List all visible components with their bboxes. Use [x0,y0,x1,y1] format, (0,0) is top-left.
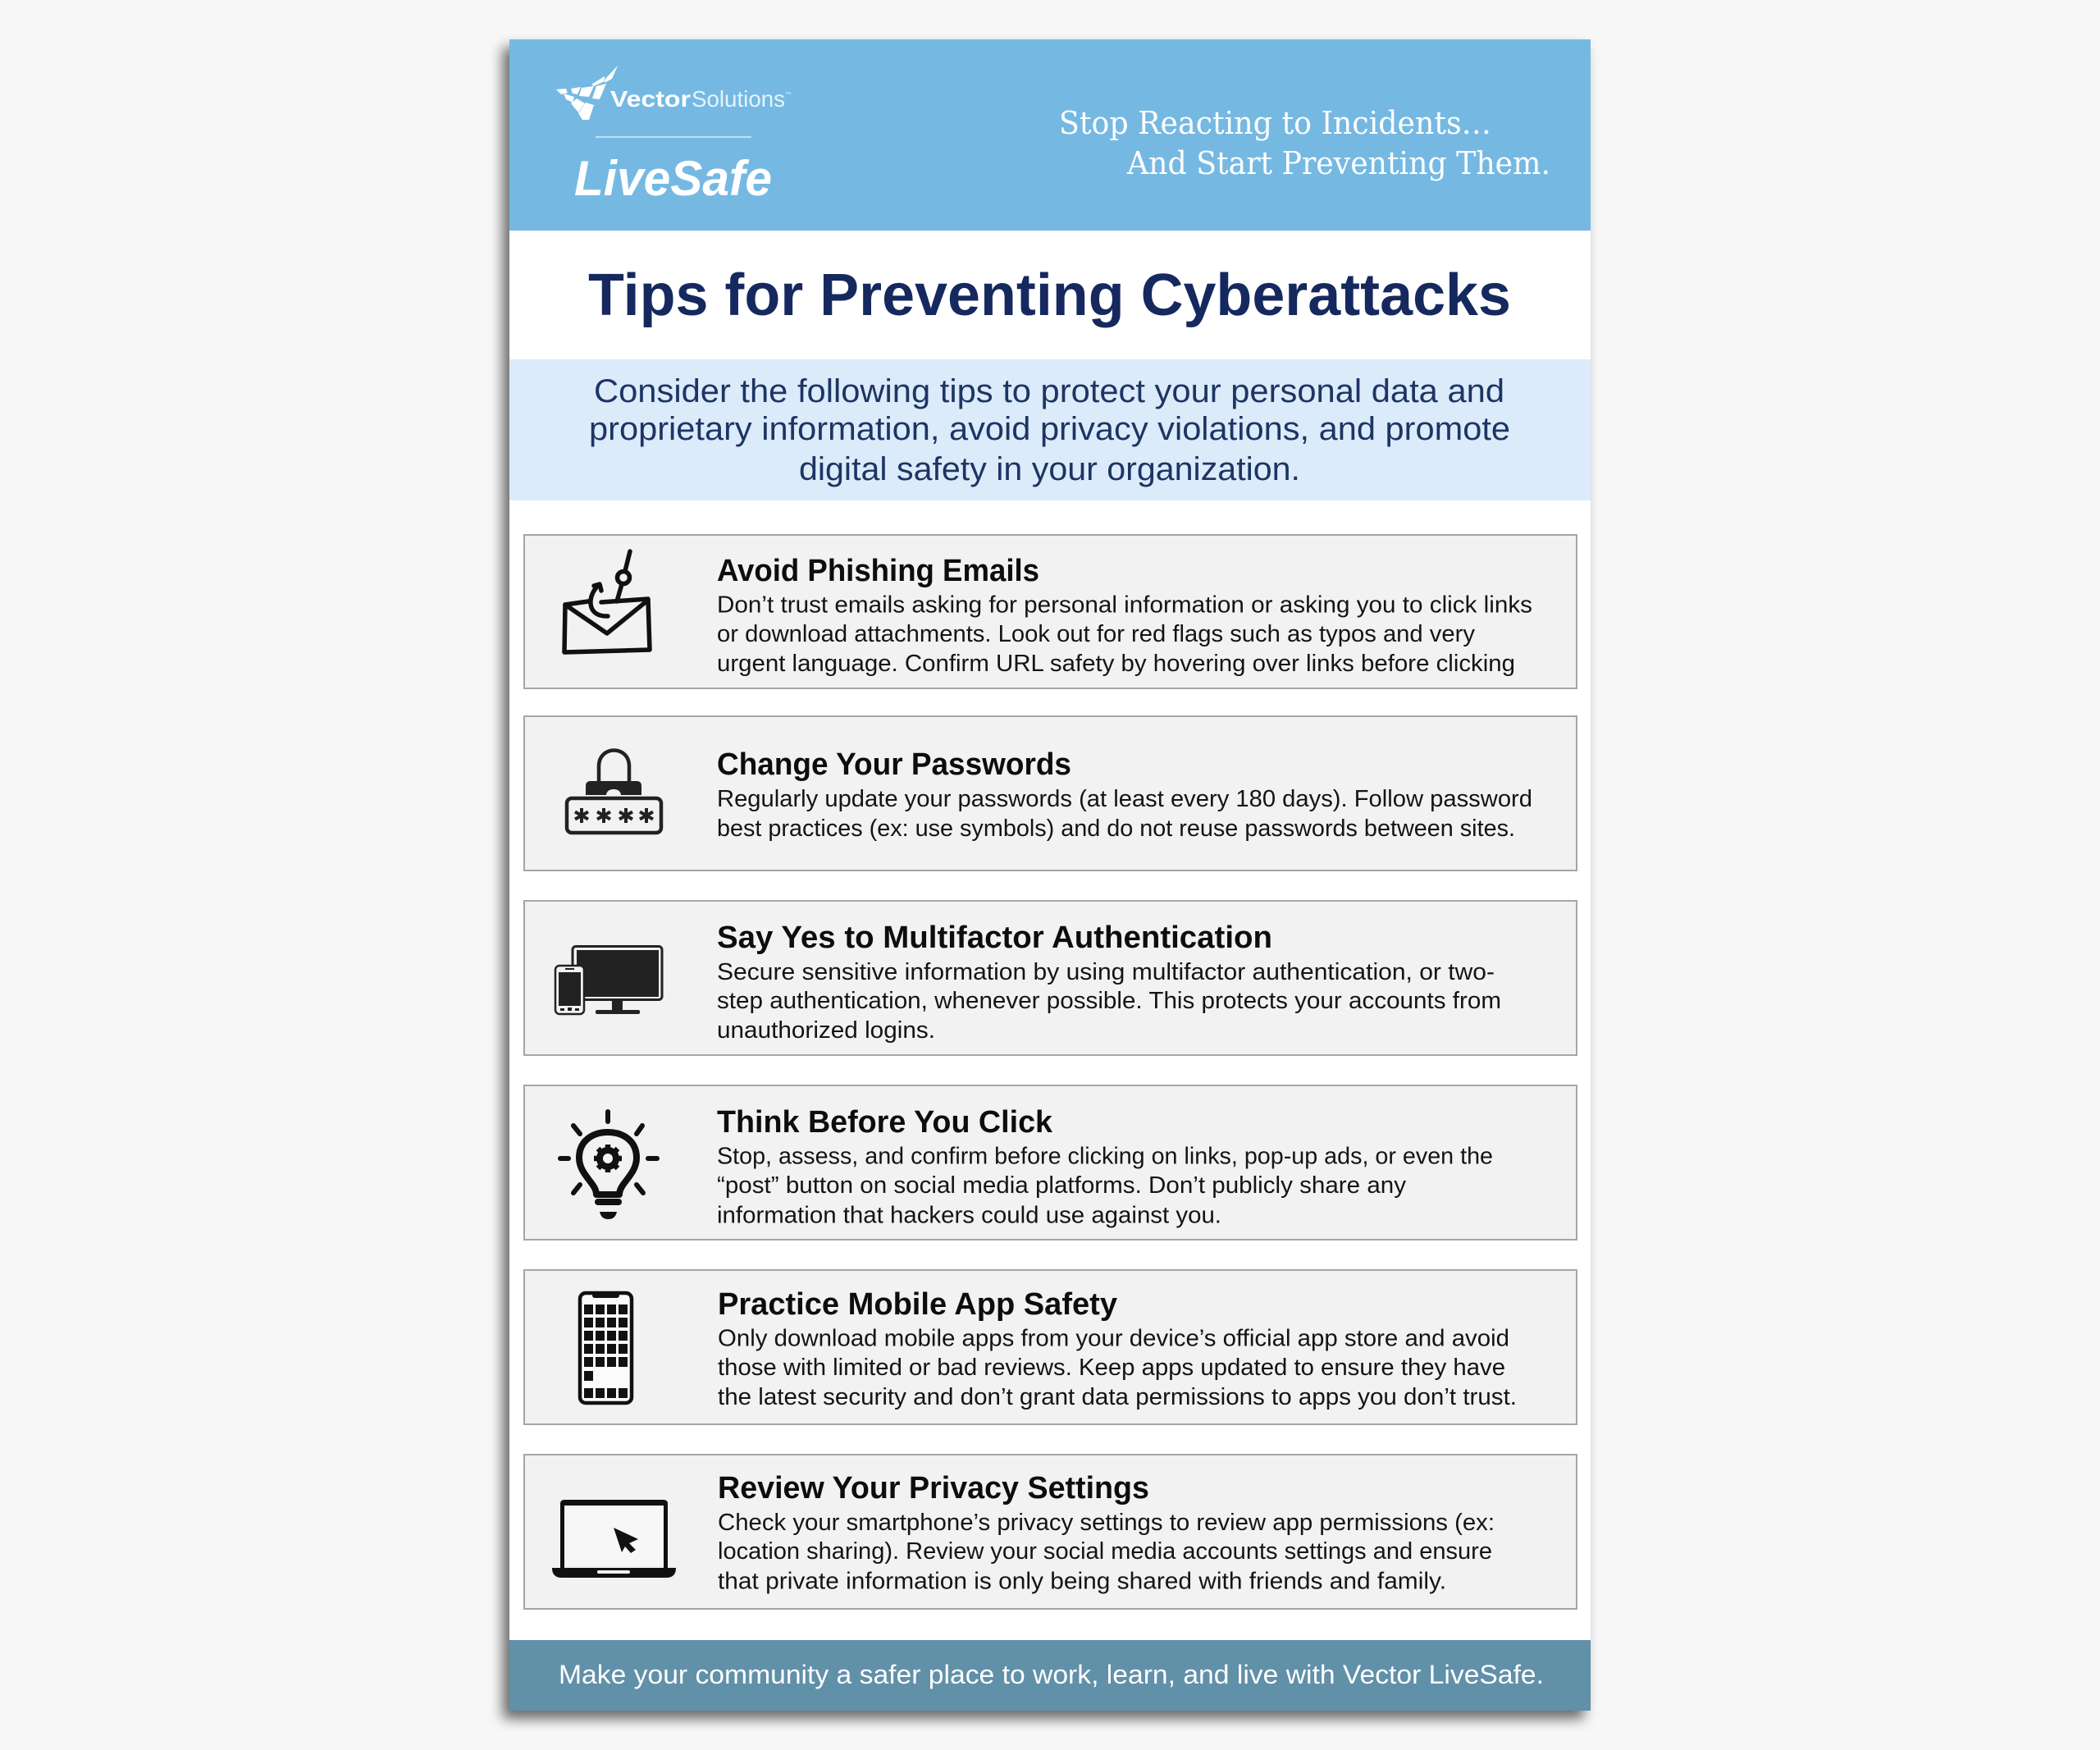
panel: think before you click: Think Before You Click [717,1105,1053,1140]
header tagline: Stop Reacting to Incidents… [1059,105,1491,141]
panel: avoid phishing emails [524,535,1577,688]
icon: monitor and smartphone [555,947,662,1014]
logo: Vector Solutions: Vector [610,86,691,112]
panel: avoid phishing emails: Don’t trust emails asking for personal information or asking you to click links [717,592,1532,619]
logo: Vector Solutions: Solutions [692,86,785,112]
panel: multifactor authentication: unauthorized logins. [717,1017,935,1044]
logo: LiveSafe: LiveSafe [574,151,772,206]
panel: multifactor authentication: Secure sensitive information by using multifactor authentication, or two- [717,959,1495,985]
intro band [509,359,1591,500]
panel: avoid phishing emails: Avoid Phishing Emails [717,554,1039,588]
intro band: digital safety in your organization. [799,451,1300,487]
panel: think before you click: “post” button on social media platforms. Don’t publicly share any [717,1172,1407,1199]
panel: change your passwords: Regularly update your passwords (at least every 180 days). Follow password [717,786,1532,812]
panel: avoid phishing emails: urgent language. Confirm URL safety by hovering over links before clicking [717,651,1515,677]
panel: think before you click: Stop, assess, and confirm before clicking on links, pop-up ads, or even the [717,1144,1493,1170]
panel: think before you click [524,1085,1577,1240]
panel: multifactor authentication: Say Yes to Multifactor Authentication [717,921,1272,955]
intro band: proprietary information, avoid privacy violations, and promote [589,411,1510,447]
title: Tips for Preventing Cyberattacks [588,263,1511,328]
panel: multifactor authentication [524,901,1577,1055]
icon: Vector Solutions mark [556,66,618,120]
header tagline: And Start Preventing Them. [1126,145,1550,181]
logo: Vector Solutions [556,66,791,120]
header banner [509,39,1591,231]
footer banner [509,1640,1591,1711]
icon: light bulb with gear [560,1112,657,1219]
panel: practice mobile app safety: the latest security and don’t grant data permissions to apps you don’t trust. [718,1384,1517,1410]
panel: review your privacy settings [524,1455,1577,1609]
panel: review your privacy settings: Check your smartphone’s privacy settings to review app permissions (ex: [718,1510,1495,1536]
panel: practice mobile app safety [524,1270,1577,1424]
panel: think before you click: information that hackers could use against you. [717,1203,1221,1229]
intro band: Consider the following tips to protect your personal data and [594,373,1504,409]
panel: review your privacy settings: Review Your Privacy Settings [718,1471,1149,1506]
icon: padlock with password field [567,750,661,833]
icon: smartphone with app grid [580,1293,632,1403]
logo: Vector Solutions: ™ [785,92,791,98]
panel: change your passwords: best practices (ex: use symbols) and do not reuse passwords between sites. [717,816,1515,842]
footer banner: Make your community a safer place to work, learn, and live with Vector LiveSafe. [559,1660,1544,1689]
panel: avoid phishing emails: or download attachments. Look out for red flags such as typos and very [717,621,1476,647]
panel: review your privacy settings: that private information is only being shared with friends and family. [718,1569,1446,1595]
header tagline [1059,105,1550,181]
panel: practice mobile app safety: Only download mobile apps from your device’s official app store and avoid [718,1326,1509,1352]
panel: change your passwords [524,716,1577,870]
panel: practice mobile app safety: Practice Mobile App Safety [718,1287,1117,1322]
panel: multifactor authentication: step authentication, whenever possible. This protects your accounts from [717,988,1501,1014]
panel: practice mobile app safety: those with limited or bad reviews. Keep apps updated to ensure they have [718,1355,1505,1381]
icon: laptop with cursor [552,1500,676,1578]
panel: change your passwords: Change Your Passwords [717,747,1071,782]
icon: phishing hook and envelope [564,551,650,652]
panel: review your privacy settings: location sharing). Review your social media accounts settings and ensure [718,1538,1492,1565]
